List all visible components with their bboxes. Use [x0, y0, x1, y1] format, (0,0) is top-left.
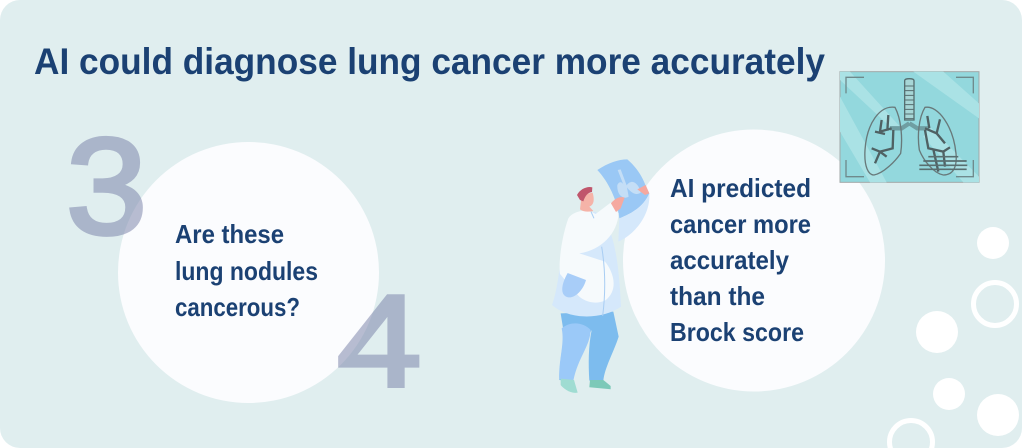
panel: question circle: [118, 142, 379, 403]
number 4: 4: [337, 269, 421, 415]
title: AI could diagnose lung cancer more accurately: [34, 41, 825, 82]
hair: [577, 187, 592, 201]
trachea: [905, 79, 914, 120]
finding text: cancer more: [670, 209, 811, 239]
question text: [175, 219, 318, 322]
left branches: [872, 115, 893, 163]
question text: Are these: [175, 219, 284, 249]
question text: cancerous?: [175, 292, 300, 322]
icon: doctor holding x-ray: [552, 159, 649, 393]
bronchi: [890, 123, 928, 128]
hands: [611, 197, 625, 212]
right branches: [925, 116, 950, 172]
coat front: [560, 203, 619, 303]
finding text: accurately: [670, 245, 789, 275]
neck and head: [580, 193, 594, 212]
finding text: AI predicted: [670, 173, 811, 203]
pocket: [562, 273, 586, 297]
scan corner brackets: [846, 77, 973, 177]
question text: lung nodules: [175, 256, 318, 286]
left lung: [865, 107, 902, 175]
scan background: [840, 72, 979, 182]
x-ray lungs: [617, 169, 641, 198]
number 3: 3: [66, 110, 147, 263]
finding text: Brock score: [670, 317, 804, 347]
x-ray sheet: [597, 159, 649, 218]
scan lines: [919, 157, 967, 169]
shoes: [561, 379, 578, 393]
coat back: [552, 212, 621, 316]
icon: lung x-ray scan: [840, 72, 979, 182]
finding text: [670, 173, 811, 347]
coat zip: [591, 212, 605, 316]
right lung: [918, 107, 956, 175]
trousers: [559, 312, 619, 382]
decorative circles: [890, 227, 1019, 448]
panel: finding circle: [623, 130, 885, 392]
finding text: than the: [670, 281, 765, 311]
